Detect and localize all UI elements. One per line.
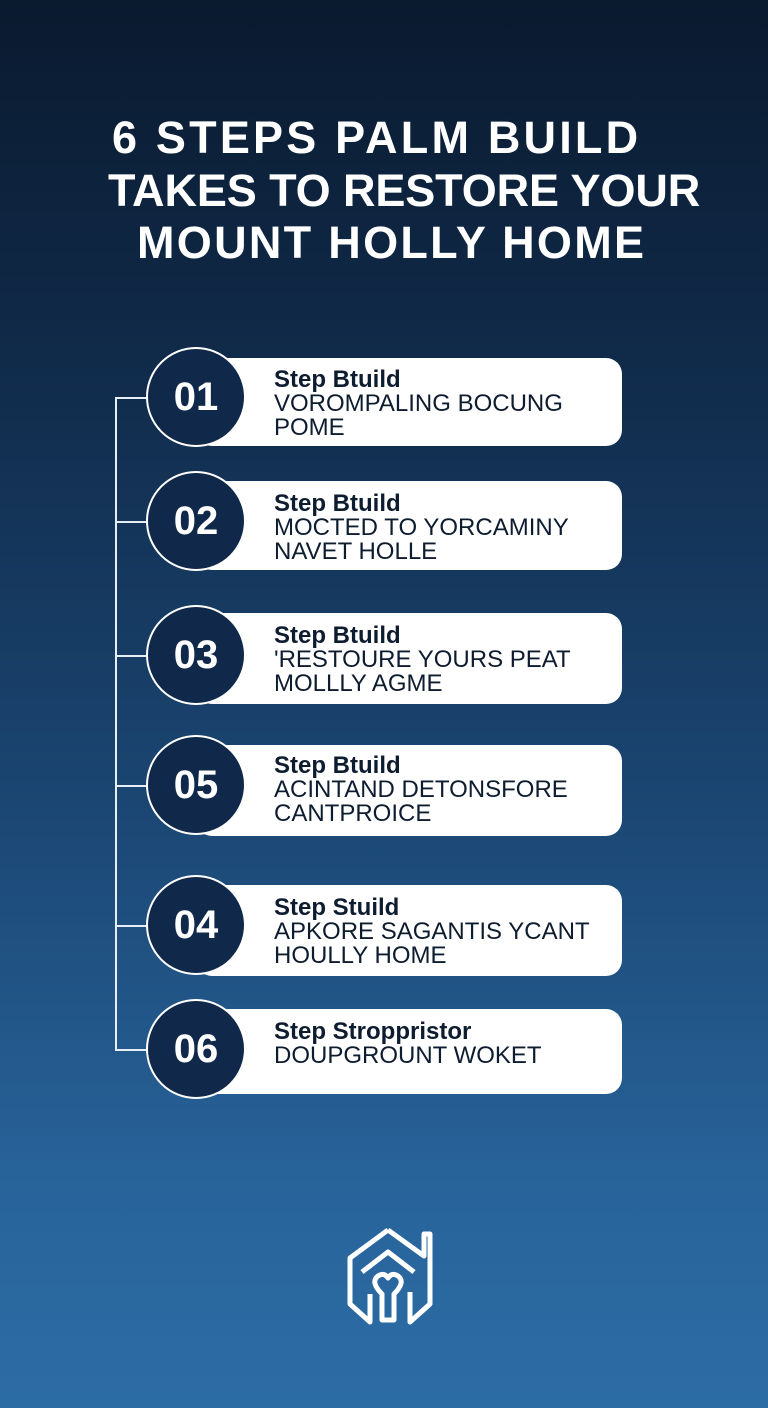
step 01 badge <box>146 347 246 447</box>
step 04 text: APKORE SAGANTIS YCANT <box>274 918 590 945</box>
step 03 text: Step Btuild <box>274 622 401 649</box>
step 02 text: NAVET HOLLE <box>274 538 437 565</box>
step 04 text <box>274 894 590 969</box>
step 05 text <box>274 752 568 827</box>
step 02 badge <box>146 471 246 571</box>
step 06 text: Step Stroppristor <box>274 1018 471 1045</box>
step 01 badge: 01 <box>174 374 218 418</box>
step 02 card <box>196 481 622 570</box>
step 06 text: DOUPGROUNT WOKET <box>274 1042 542 1069</box>
step 05 text: Step Btuild <box>274 752 401 779</box>
step 03 badge: 03 <box>174 632 218 676</box>
timeline connector <box>115 397 117 1051</box>
step 04 text: Step Stuild <box>274 894 399 921</box>
step 06 card <box>196 1009 622 1094</box>
step 06 badge <box>146 999 246 1099</box>
title <box>108 112 700 268</box>
step 03 card <box>196 613 622 704</box>
step 04 card <box>196 885 622 976</box>
step 06 text <box>274 1018 542 1069</box>
step 05 badge <box>146 735 246 835</box>
step 04 badge: 04 <box>174 902 218 946</box>
step 02 text: Step Btuild <box>274 490 401 517</box>
step 02 text <box>274 490 569 565</box>
step 03 badge <box>146 605 246 705</box>
step 01 card <box>196 358 622 446</box>
step 02 text: MOCTED TO YORCAMINY <box>274 514 569 541</box>
step 01 text: POME <box>274 414 345 441</box>
step 06 badge: 06 <box>174 1026 218 1070</box>
step 01 text: VOROMPALING BOCUNG <box>274 390 563 417</box>
step 05 badge: 05 <box>174 762 218 806</box>
step 03 text <box>274 622 571 697</box>
step 05 text: CANTPROICE <box>274 800 431 827</box>
step 02 badge: 02 <box>174 498 218 542</box>
step 04 text: HOULLY HOME <box>274 942 446 969</box>
step 01 text <box>274 366 563 441</box>
icon: house key logo <box>348 1228 432 1324</box>
step 01 text: Step Btuild <box>274 366 401 393</box>
step 04 badge <box>146 875 246 975</box>
step 03 text: MOLLLY AGME <box>274 670 443 697</box>
text: 6 STEPS PALM BUILD <box>112 112 641 163</box>
step 05 card <box>196 745 622 836</box>
step 05 text: ACINTAND DETONSFORE <box>274 776 568 803</box>
text: TAKES TO RESTORE YOUR <box>108 165 700 216</box>
step 03 text: 'RESTOURE YOURS PEAT <box>274 646 571 673</box>
text: MOUNT HOLLY HOME <box>137 217 646 268</box>
